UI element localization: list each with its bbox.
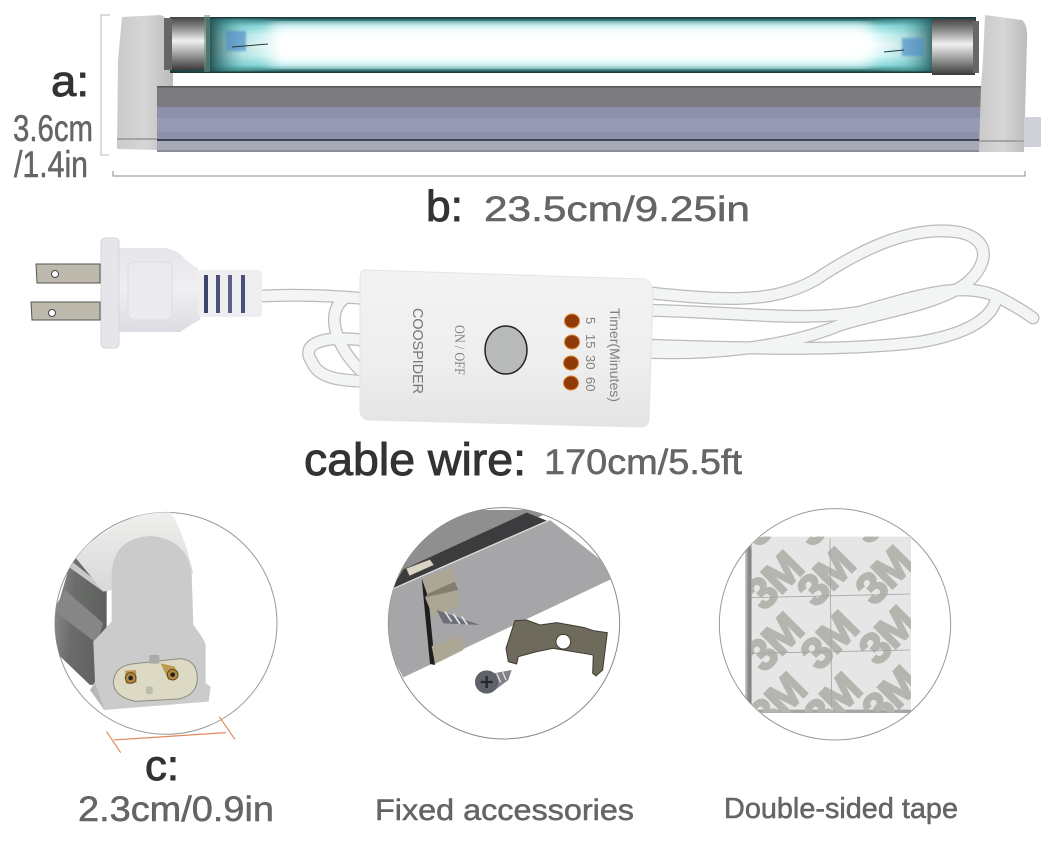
- 3M logo pattern: 3M: [846, 538, 922, 614]
- plug: [31, 238, 262, 348]
- power button: [485, 326, 527, 374]
- lamp: UV tube with aluminium base: [117, 15, 1041, 152]
- loose screw: [475, 670, 512, 694]
- value c width: 2.3cm/0.9in: [78, 790, 274, 829]
- 3M logo pattern: 3M: [740, 665, 816, 741]
- value a height: [13, 108, 93, 185]
- on off label: ON / OFF: [451, 325, 467, 375]
- double-sided tape caption: Double-sided tape: [724, 793, 958, 825]
- socket body: [90, 536, 211, 710]
- housing top: [73, 508, 193, 592]
- profile face: [387, 520, 620, 677]
- metal tube ends: [164, 15, 979, 75]
- 3M logo pattern: 3M: [850, 598, 926, 674]
- 3M logo pattern: 3M: [784, 479, 860, 555]
- left end cap: [117, 15, 173, 150]
- timer control box: [360, 270, 653, 427]
- timer labels: 60: [583, 377, 598, 391]
- socket opening: [113, 659, 197, 701]
- value a height: /1.4in: [14, 144, 88, 185]
- rail side: [55, 557, 107, 685]
- circle detail: double-sided tape: [718, 508, 952, 740]
- value b length: 23.5cm/9.25in: [484, 190, 750, 229]
- timer labels: 30: [583, 355, 598, 369]
- right end cap: [979, 15, 1027, 152]
- wire stub: [1024, 117, 1041, 147]
- 3M logo pattern: [752, 536, 911, 712]
- loose clip: [506, 620, 607, 676]
- plug body: [119, 248, 200, 332]
- lamp base: aluminium rail: [157, 86, 982, 152]
- 3M logo pattern: 3M: [788, 540, 864, 616]
- circle detail: lamp end socket: [47, 508, 277, 753]
- timer labels: [583, 308, 623, 402]
- 3M logo pattern: 3M: [736, 543, 812, 619]
- profile top: [394, 510, 543, 588]
- cable wire value: 170cm/5.5ft: [544, 443, 742, 482]
- label b: b:: [426, 182, 463, 231]
- label a: a:: [51, 57, 89, 106]
- circle detail: fixed accessories: [380, 508, 620, 739]
- orange width marker: [107, 717, 235, 753]
- 3M logo pattern: 3M: [841, 477, 917, 553]
- cable wire label: cable wire:: [304, 434, 526, 485]
- power cable wires: [262, 231, 1033, 382]
- timer LEDs: [564, 314, 580, 390]
- 3M logo pattern: 3M: [731, 479, 807, 555]
- fixed accessories caption: Fixed accessories: [375, 794, 634, 827]
- mounted clip: [406, 559, 434, 576]
- glowing tube: [170, 17, 976, 73]
- dimension b bracket: [113, 171, 1025, 176]
- brand label: COOSPIDER: [409, 308, 426, 394]
- timer labels: 5: [583, 317, 598, 324]
- 3M logo pattern: 3M: [791, 603, 867, 679]
- tube electrodes: [226, 31, 924, 56]
- mounted screw: [437, 610, 480, 625]
- plug prongs: [31, 264, 100, 320]
- pins: [125, 670, 137, 684]
- 3M logo pattern: 3M: [795, 665, 871, 741]
- plug strain relief ribs: [198, 270, 262, 317]
- 3M logo pattern: 3M: [853, 658, 929, 734]
- dimension a bracket: [101, 15, 110, 155]
- 3M logo pattern: 3M: [736, 605, 812, 681]
- label c: c:: [145, 742, 179, 790]
- value a height: 3.6cm: [13, 108, 93, 149]
- timer labels: Timer(Minutes): [607, 308, 623, 402]
- timer labels: 15: [583, 334, 598, 348]
